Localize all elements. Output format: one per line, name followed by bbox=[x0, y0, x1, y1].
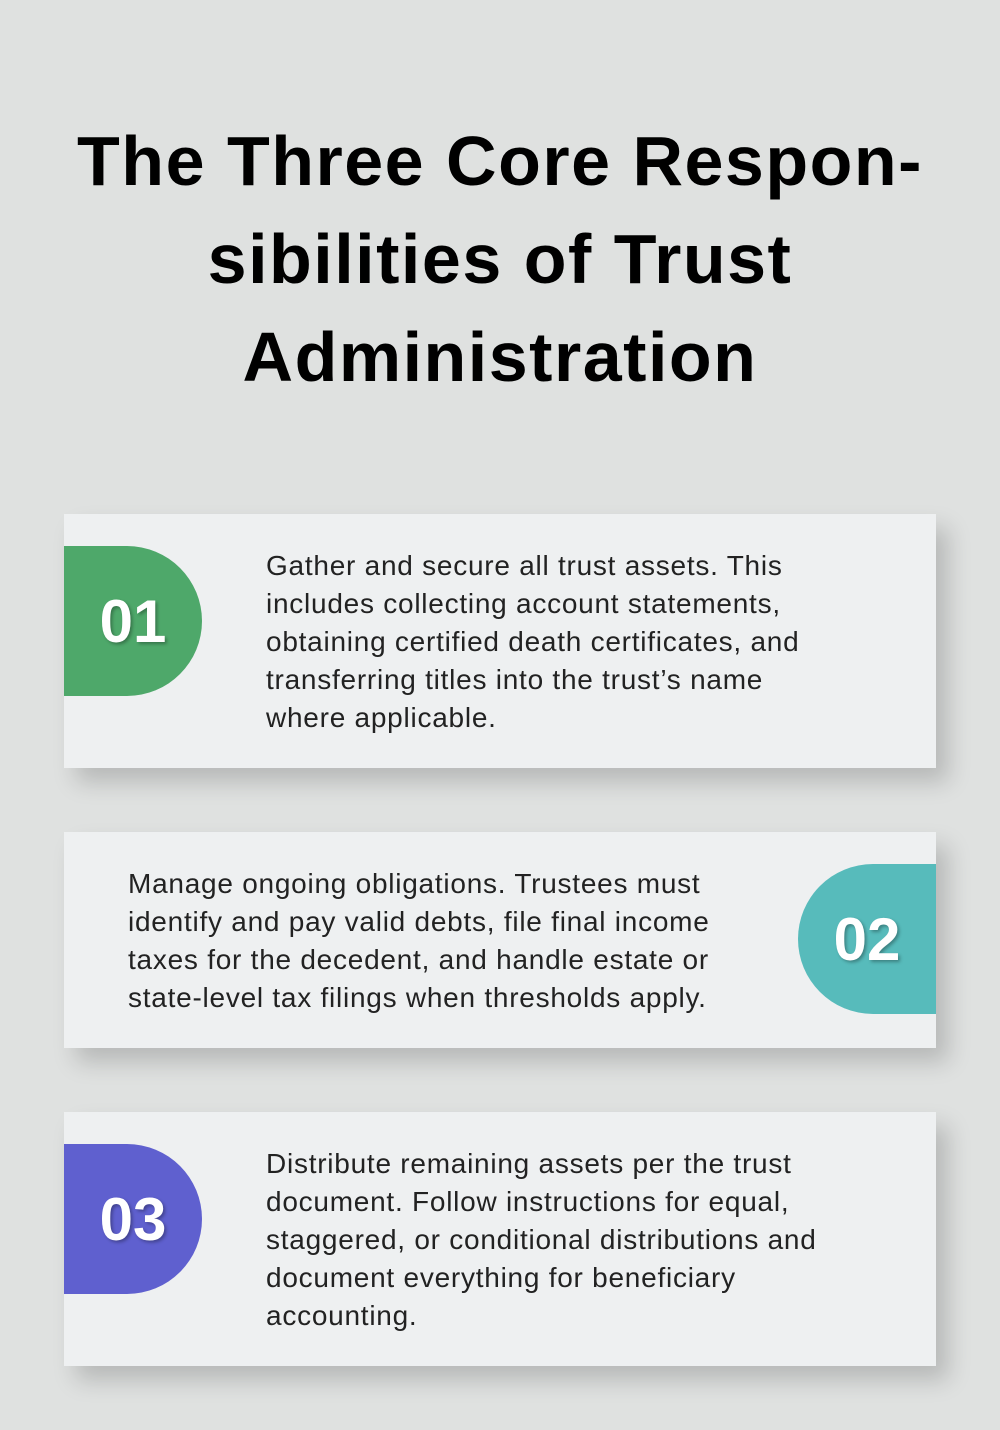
text 1 bbox=[266, 550, 799, 733]
text 1: transferring titles into the trust’s name bbox=[266, 664, 763, 695]
badge 03 bbox=[64, 1144, 202, 1294]
title: sibilities of Trust bbox=[208, 220, 792, 298]
badge 01: 01 bbox=[100, 588, 166, 654]
panel: step 2 bbox=[64, 832, 936, 1048]
badge 02: 02 bbox=[834, 906, 900, 972]
title: The Three Core Respon- bbox=[77, 122, 923, 200]
text 2 bbox=[128, 868, 710, 1013]
text 2: Manage ongoing obligations. Trustees must bbox=[128, 868, 700, 899]
title: Administration bbox=[243, 318, 757, 396]
text 3: accounting. bbox=[266, 1300, 417, 1331]
badge 02 bbox=[798, 864, 936, 1014]
text 1: includes collecting account statements, bbox=[266, 588, 781, 619]
text 3: document everything for beneficiary bbox=[266, 1262, 736, 1293]
text 1: where applicable. bbox=[266, 702, 497, 733]
text 3 bbox=[266, 1148, 817, 1331]
text 3: document. Follow instructions for equal, bbox=[266, 1186, 789, 1217]
text 3: staggered, or conditional distributions and bbox=[266, 1224, 817, 1255]
badge 01 bbox=[64, 546, 202, 696]
panel: step 3 bbox=[64, 1112, 936, 1366]
text 1: Gather and secure all trust assets. This bbox=[266, 550, 783, 581]
text 2: state-level tax filings when thresholds apply. bbox=[128, 982, 707, 1013]
text 3: Distribute remaining assets per the trust bbox=[266, 1148, 792, 1179]
badge 03: 03 bbox=[100, 1186, 166, 1252]
panel: step 1 bbox=[64, 514, 936, 768]
text 1: obtaining certified death certificates, and bbox=[266, 626, 799, 657]
text 2: identify and pay valid debts, file final income bbox=[128, 906, 710, 937]
title bbox=[77, 122, 923, 396]
text 2: taxes for the decedent, and handle estate or bbox=[128, 944, 709, 975]
